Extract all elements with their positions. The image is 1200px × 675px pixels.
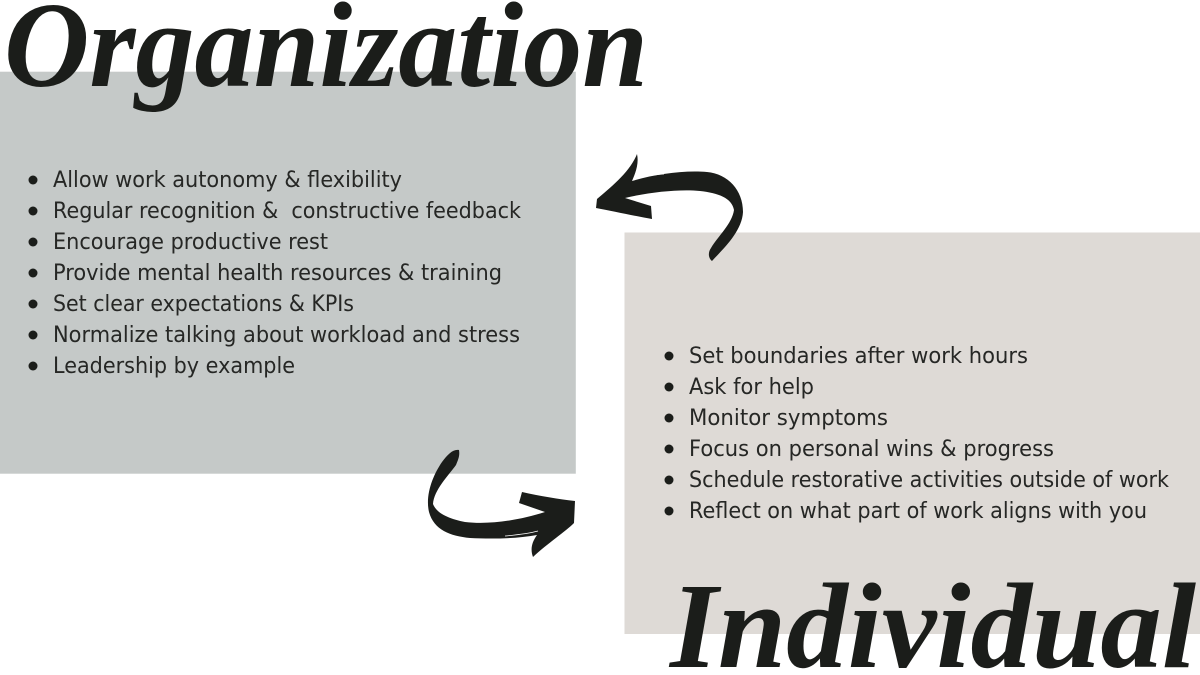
list: organization actions: Provide mental health resources & training — [53, 261, 502, 286]
arrow: organization to individual — [428, 450, 575, 557]
list: individual actions: Schedule restorative activities outside of work — [689, 468, 1169, 493]
list: organization actions: Set clear expectations & KPIs — [53, 292, 354, 317]
list: individual actions: Set boundaries after work hours — [689, 344, 1028, 369]
list: organization actions — [28, 168, 521, 379]
list: individual actions: Reflect on what part of work aligns with you — [689, 499, 1147, 524]
arrow: individual to organization — [596, 154, 743, 261]
panel: organization background — [0, 72, 576, 474]
list: individual actions — [664, 344, 1169, 524]
list: organization actions: Normalize talking about workload and stress — [53, 323, 520, 348]
list: organization actions: Encourage productive rest — [53, 230, 328, 255]
list: organization actions: Leadership by example — [53, 354, 295, 379]
list: organization actions: Regular recognition & constructive feedback — [53, 199, 521, 224]
list: individual actions: Monitor symptoms — [689, 406, 888, 431]
list: individual actions: Focus on personal wins & progress — [689, 437, 1054, 462]
list: organization actions: Allow work autonomy & flexibility — [53, 168, 402, 193]
list: individual actions: Ask for help — [689, 375, 814, 400]
panel: individual background — [624, 232, 1200, 634]
